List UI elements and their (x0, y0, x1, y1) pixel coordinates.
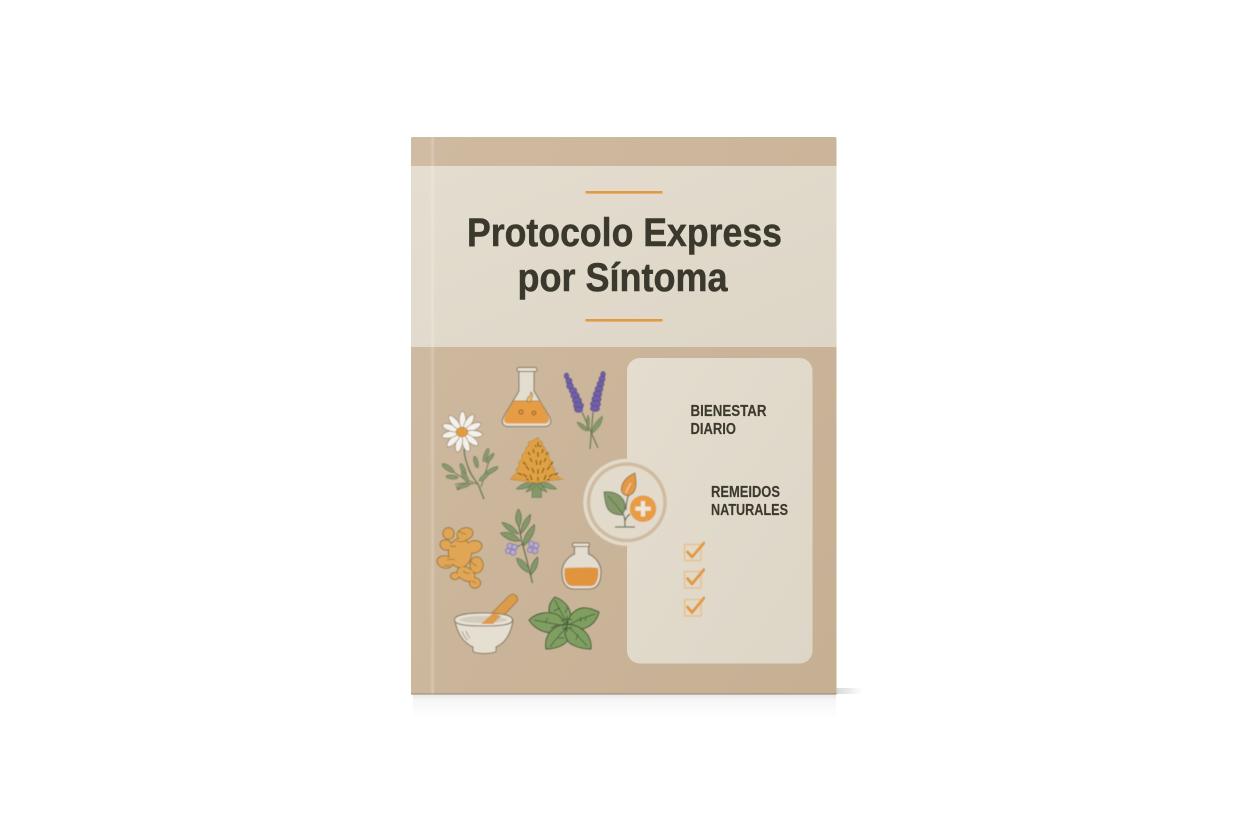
icon: flask (502, 368, 551, 426)
icon: mortar and pestle (454, 594, 518, 654)
icon: daisy (441, 412, 499, 499)
label: bienestar diario: BIENESTAR (690, 403, 767, 420)
label: bienestar diario: DIARIO (690, 421, 736, 438)
book spine (411, 137, 434, 694)
book cover (411, 137, 836, 694)
book shadow (413, 688, 862, 718)
title: Protocolo Express (467, 211, 782, 255)
icon: lavender (564, 372, 605, 449)
bottom rule (586, 319, 662, 322)
central emblem (583, 459, 670, 546)
right panel (627, 358, 812, 664)
checklist (684, 543, 704, 616)
label: remedios naturales: REMEIDOS (711, 484, 780, 501)
emblem: orange leaf (621, 473, 636, 496)
emblem: plant stem (615, 494, 635, 527)
title (467, 211, 782, 300)
label: remedios naturales: NATURALES (711, 502, 788, 519)
emblem: plus badge (630, 495, 656, 522)
title band (411, 166, 836, 347)
checkbox 2 (684, 570, 704, 588)
title: por Síntoma (518, 256, 728, 300)
top rule (586, 191, 662, 194)
checkbox 3 (684, 598, 704, 616)
icon: mint (529, 597, 599, 649)
emblem: green leaf (604, 492, 625, 515)
icon: thistle flower (510, 438, 563, 498)
label: bienestar diario (690, 403, 767, 438)
checkbox 1 (684, 543, 704, 560)
icon: round bottle (562, 543, 601, 589)
icon: ginger (435, 525, 484, 588)
icon: rosemary sprig (500, 509, 539, 583)
label: remedios naturales (711, 484, 788, 519)
